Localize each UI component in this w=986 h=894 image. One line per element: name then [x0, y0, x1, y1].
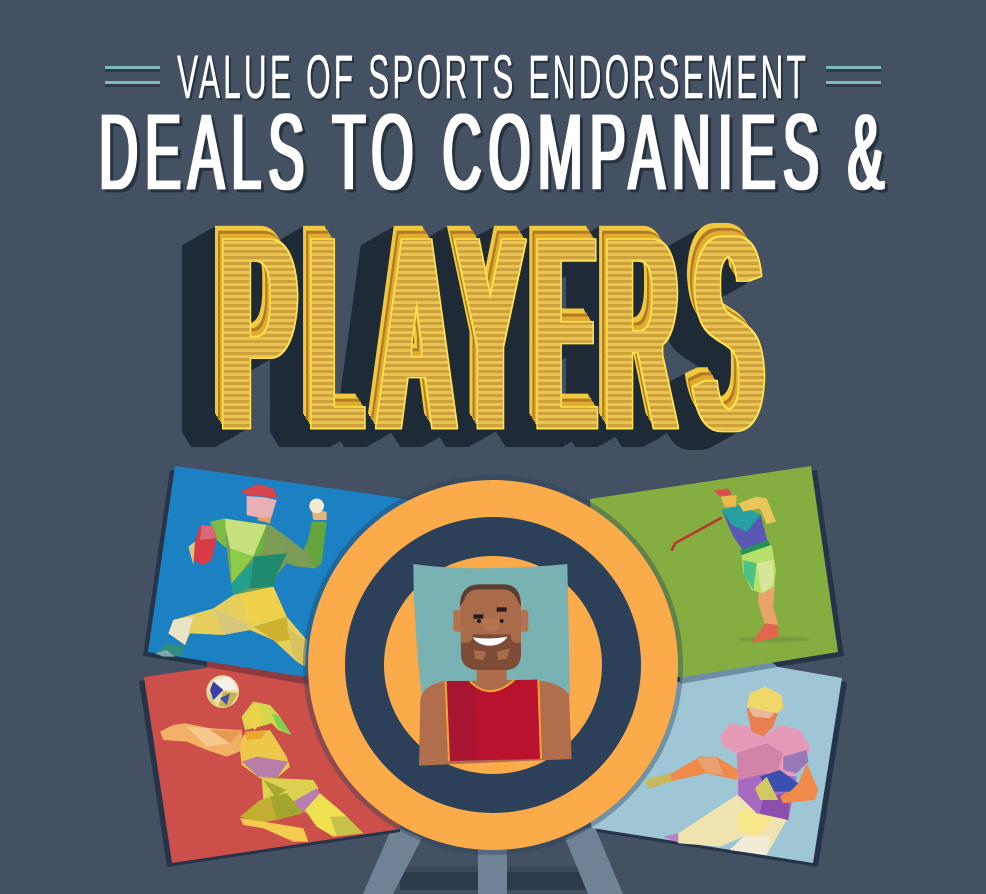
neck: [477, 665, 507, 685]
title word: players in gold 3D letters: R: [606, 171, 677, 497]
panel: volleyball player on red: [139, 640, 400, 867]
panel: baseball player on blue: [143, 466, 420, 685]
title word: players in gold 3D letters: S: [694, 171, 763, 497]
brows and eyes: [473, 607, 507, 623]
decorative bars right: [826, 66, 881, 87]
panel: golfer on green: [590, 466, 844, 684]
title word: players in gold 3D letters: A: [377, 171, 456, 496]
portrait card: [413, 564, 570, 695]
title word: players in gold 3D letters: [221, 170, 763, 497]
title word: players in gold 3D letters: L: [311, 172, 362, 497]
golfer figure: [672, 488, 810, 643]
volleyball figure: [160, 675, 363, 842]
jersey: [446, 680, 541, 761]
ears: [453, 610, 462, 632]
nose: [482, 618, 499, 632]
blue shadow on red panel: [207, 660, 310, 685]
baseball figure: [155, 484, 327, 667]
green shadow on light blue panel: [680, 661, 778, 684]
title word: players in gold 3D letters: P: [221, 170, 296, 496]
football figure: [645, 687, 818, 855]
beard: [461, 634, 521, 670]
magnifier ring: [303, 475, 683, 855]
decorative bars left: [105, 66, 160, 87]
title word: players in gold 3D letters: Y: [456, 171, 525, 497]
title word: players in gold 3D letters: E: [537, 171, 595, 496]
panel: football player on light blue: [560, 650, 847, 867]
title line 1: [105, 43, 881, 111]
ball: [206, 675, 239, 708]
head: [460, 584, 521, 670]
stand legs: [363, 825, 623, 894]
arms: [419, 680, 572, 766]
smile: [473, 637, 508, 646]
portrait of athlete: [413, 564, 572, 766]
